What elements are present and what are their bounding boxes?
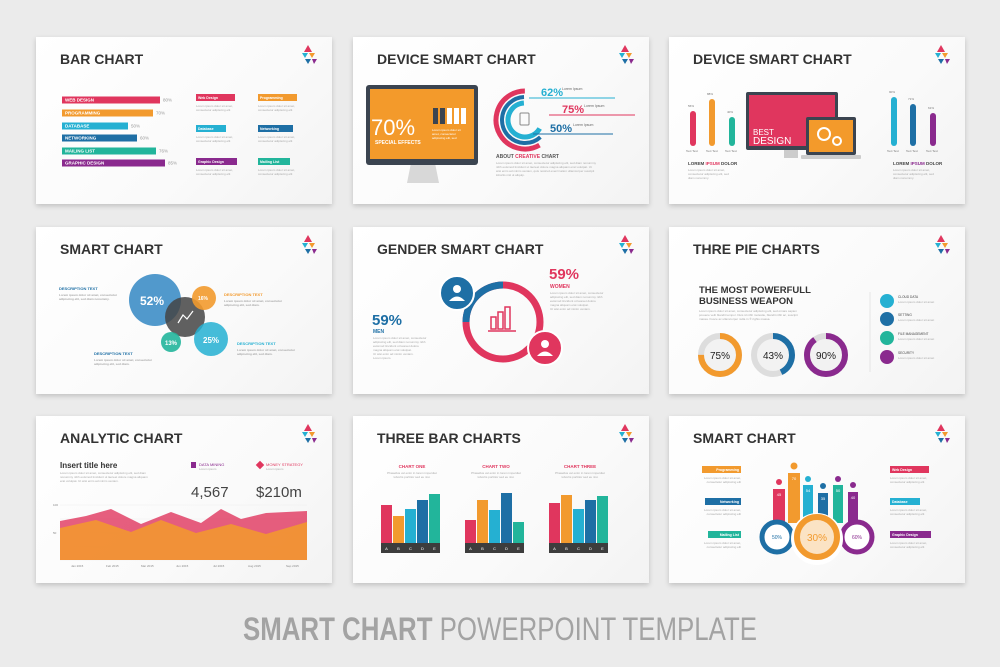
description labels: DESCRIPTION TEXT bbox=[237, 341, 276, 346]
title: DEVICE SMART CHART bbox=[693, 51, 852, 67]
left tubes: Text Text bbox=[725, 149, 737, 153]
chart one: Phasellus vel enim in lorem imperdiet bbox=[387, 471, 437, 475]
bars and circles: 45 bbox=[777, 492, 782, 497]
right tags: consectetur adipiscing elit bbox=[890, 512, 925, 516]
icon list: Lorem ipsum dolor sit amet bbox=[898, 318, 934, 322]
donuts: 43% bbox=[763, 351, 783, 362]
chart three: C bbox=[577, 546, 580, 551]
chart two: B bbox=[481, 546, 484, 551]
bars and circles: 35 bbox=[821, 496, 826, 501]
women stats bbox=[549, 266, 603, 311]
tags: Web Design bbox=[198, 96, 218, 100]
logo bbox=[302, 45, 317, 64]
logo bbox=[302, 424, 317, 443]
chart three: E bbox=[601, 546, 604, 551]
logo bbox=[619, 45, 634, 64]
text blocks: Lorem ipsum dolor sit amet, bbox=[688, 168, 725, 172]
description labels: Lorem ipsum dolor sit amet, consectetur bbox=[224, 299, 283, 303]
icon list bbox=[880, 294, 934, 364]
chart two bbox=[465, 464, 524, 553]
slide: gender smart chart bbox=[353, 227, 649, 394]
men stats: Ut wisi enim ad minim veniam. bbox=[373, 352, 414, 356]
title: GENDER SMART CHART bbox=[377, 241, 544, 257]
icon list: Lorem ipsum dolor sit amet bbox=[898, 356, 934, 360]
horizontal bars: 76% bbox=[159, 148, 168, 154]
slide: bar chart: Lorem ipsum dolor sit amet, bbox=[258, 168, 295, 172]
area chart: Jul 2015 bbox=[213, 564, 225, 568]
logo bbox=[619, 235, 634, 254]
footer title: SMART CHART POWERPOINT TEMPLATE bbox=[243, 611, 757, 647]
chart two: C bbox=[493, 546, 496, 551]
tags: Networking bbox=[260, 127, 279, 131]
stats: MONEY STRATEGY bbox=[266, 462, 303, 467]
icon list: Lorem ipsum dolor sit amet bbox=[898, 300, 934, 304]
description labels: adipiscing elit, sed diam. bbox=[237, 352, 273, 356]
intro text: nonummy nibh euismod tincidunt ut laoreet dolore magna aliquam bbox=[60, 475, 148, 479]
right tags bbox=[890, 466, 931, 549]
slide: smart chart infographic bbox=[669, 416, 965, 583]
slide: bar chart: consectetur adipiscing elit bbox=[258, 172, 293, 176]
women stats: adipiscing elit, sed diam nonummy nibh bbox=[550, 295, 603, 299]
left tubes: Text Text bbox=[706, 149, 718, 153]
description labels: Lorem ipsum dolor sit amet, consectetur bbox=[237, 348, 296, 352]
intro text: erat volutpat. Ut wisi enim ad minim veniam. bbox=[60, 479, 119, 483]
horizontal bars bbox=[62, 96, 177, 166]
slide: bar chart: Lorem ipsum dolor sit amet, bbox=[196, 135, 233, 139]
bars and circles: 40 bbox=[851, 495, 856, 500]
tags: Mailing List bbox=[260, 160, 280, 164]
chart three: Phasellus vel enim in lorem imperdiet bbox=[555, 471, 605, 475]
description labels: DESCRIPTION TEXT bbox=[59, 286, 98, 291]
left tags: Programming bbox=[716, 468, 739, 472]
chart three: B bbox=[565, 546, 568, 551]
text blocks bbox=[688, 161, 943, 180]
women stats: Lorem ipsum dolor sit amet, consectetur bbox=[550, 291, 603, 295]
monitor and laptop bbox=[746, 92, 861, 159]
right tags: Lorem ipsum dolor sit amet, bbox=[890, 508, 927, 512]
donuts: 90% bbox=[816, 351, 836, 362]
headline: BUSINESS WEAPON bbox=[699, 296, 793, 307]
horizontal bars: DATABASE bbox=[65, 124, 89, 128]
chart two: lobortis porttitor sed eu nisi. bbox=[478, 475, 515, 479]
bubbles: 52% bbox=[140, 294, 164, 308]
men stats bbox=[372, 312, 426, 360]
chart two: A bbox=[469, 546, 472, 551]
horizontal bars: MAILING LIST bbox=[65, 148, 95, 154]
logo bbox=[935, 45, 950, 64]
title: ANALYTIC CHART bbox=[60, 430, 183, 446]
about text: ABOUT CREATIVE CHART bbox=[496, 154, 559, 160]
stats: 4,567 bbox=[191, 484, 229, 501]
right tags: consectetur adipiscing elit bbox=[890, 545, 925, 549]
slide: device smart chart 1: Lorem Ipsum bbox=[562, 87, 583, 91]
description labels bbox=[59, 286, 296, 366]
chart three bbox=[549, 464, 608, 553]
slide: bar chart: Lorem ipsum dolor sit amet, bbox=[196, 168, 233, 172]
women stats: WOMEN bbox=[550, 284, 570, 290]
slide: device smart chart 1: Lorem Ipsum bbox=[573, 123, 594, 127]
chart one: B bbox=[397, 546, 400, 551]
right tubes: 61% bbox=[928, 106, 934, 110]
monitor and laptop: BEST bbox=[753, 128, 774, 137]
monitor: SPECIAL EFFECTS bbox=[375, 140, 421, 146]
left tags: Mailing List bbox=[720, 533, 740, 537]
left tubes: 56% bbox=[688, 104, 694, 108]
logo bbox=[302, 235, 317, 254]
slide: bar chart: consectetur adipiscing elit bbox=[258, 139, 293, 143]
bars and circles bbox=[762, 462, 872, 565]
left tags bbox=[702, 466, 741, 549]
bubbles: 16% bbox=[198, 296, 209, 302]
area chart: Sep 2015 bbox=[286, 564, 299, 568]
men stats: Lorem ipsum. bbox=[373, 356, 391, 360]
chart one: D bbox=[421, 546, 424, 551]
icon list: CLOUD DATA bbox=[898, 295, 919, 299]
intro text: Lorem ipsum dolor sit amet, consectetur adipiscing elit, sed diam bbox=[60, 471, 147, 475]
horizontal bars: WEB DESIGN bbox=[65, 98, 94, 102]
left tubes bbox=[686, 92, 737, 153]
slide: device smart chart 1: 75% bbox=[562, 104, 584, 116]
title: DEVICE SMART CHART bbox=[377, 51, 536, 67]
right tags: Lorem ipsum dolor sit amet, bbox=[890, 541, 927, 545]
bubbles bbox=[129, 274, 228, 356]
monitor: amet, consectetur bbox=[432, 132, 456, 136]
right tags: Lorem ipsum dolor sit amet, bbox=[890, 476, 927, 480]
stats: Lorem ipsum bbox=[266, 467, 284, 471]
title: SMART CHART bbox=[693, 430, 796, 446]
men stats: euismod tincidunt ut laoreet dolore bbox=[373, 344, 419, 348]
title: THRE PIE CHARTS bbox=[693, 241, 820, 257]
left tags: Lorem ipsum dolor sit amet, bbox=[704, 508, 741, 512]
headline bbox=[699, 285, 811, 321]
horizontal bars: GRAPHIC DESIGN bbox=[65, 160, 104, 166]
area chart: Jun 2015 bbox=[176, 564, 189, 568]
men stats: MEN bbox=[373, 329, 384, 335]
left tags: consectetur adipiscing elit bbox=[707, 480, 741, 484]
area chart: 50 bbox=[53, 531, 57, 535]
headline: THE MOST POWERFULL bbox=[699, 285, 811, 296]
horizontal bars: 85% bbox=[168, 160, 177, 166]
monitor and laptop: DESIGN bbox=[753, 136, 791, 147]
horizontal bars: NETWORKING bbox=[65, 136, 97, 140]
chart one: E bbox=[433, 546, 436, 551]
right tags: Web Design bbox=[892, 468, 912, 472]
right tubes: 71% bbox=[908, 97, 914, 101]
slide: device smart chart 1: wisi enim ad minim veniam, quis nostrud exerci tation ullamcorper suscipit bbox=[496, 169, 594, 173]
chart three: CHART THREE bbox=[564, 464, 596, 469]
stats: DATA MINING bbox=[199, 462, 224, 467]
men stats: magna aliquam erat volutpat. bbox=[373, 348, 412, 352]
chart two: Phasellus vel enim in lorem imperdiet bbox=[471, 471, 521, 475]
stats: $210m bbox=[256, 484, 302, 501]
left tags: Lorem ipsum dolor sit amet, bbox=[704, 541, 741, 545]
headline: Lorem ipsum dolor sit amet, consectetur adipiscing elit, sed ornare sapien bbox=[699, 309, 797, 313]
bars and circles: 50 bbox=[836, 488, 841, 493]
area chart bbox=[53, 503, 307, 568]
right tags: Graphic Design bbox=[892, 533, 918, 537]
logo bbox=[935, 235, 950, 254]
chart one: A bbox=[385, 546, 388, 551]
area chart: 100 bbox=[53, 503, 58, 507]
women stats: magna aliquam erat volutpat. bbox=[550, 303, 589, 307]
stats: Lorem ipsum bbox=[199, 467, 217, 471]
tags: Graphic Design bbox=[198, 160, 224, 164]
chart three: D bbox=[589, 546, 592, 551]
chart one: CHART ONE bbox=[399, 464, 425, 469]
text blocks: diam nonummy. bbox=[688, 176, 709, 180]
chart two: CHART TWO bbox=[482, 464, 510, 469]
monitor: adipiscing elit, sed bbox=[432, 136, 457, 140]
chart two: D bbox=[505, 546, 508, 551]
logo bbox=[935, 424, 950, 443]
slide: device smart chart 1 bbox=[353, 37, 649, 204]
women stats: Ut wisi enim ad minim veniam. bbox=[550, 307, 591, 311]
area chart: Feb 2015 bbox=[106, 564, 119, 568]
title: BAR CHART bbox=[60, 51, 144, 67]
tags: Database bbox=[198, 127, 214, 131]
chart one: lobortis porttitor sed eu nisi. bbox=[394, 475, 431, 479]
left tags: consectetur adipiscing elit bbox=[707, 545, 741, 549]
bubbles: 13% bbox=[165, 341, 178, 347]
text blocks: consectetur adipiscing elit, sed bbox=[688, 172, 729, 176]
chart one bbox=[381, 464, 440, 553]
area chart: Mar 2015 bbox=[141, 564, 154, 568]
women stats: euismod tincidunt ut laoreet dolore bbox=[550, 299, 596, 303]
horizontal bars: 60% bbox=[140, 136, 149, 140]
right tubes: Text Text bbox=[887, 149, 899, 153]
left tags: Lorem ipsum dolor sit amet, bbox=[704, 476, 741, 480]
slide: device smart chart 1: Lorem Ipsum bbox=[584, 104, 605, 108]
tags: Programming bbox=[260, 96, 283, 100]
monitor bbox=[366, 85, 478, 183]
ring chart bbox=[440, 276, 562, 365]
description labels: Lorem ipsum dolor sit amet, consectetur bbox=[59, 293, 118, 297]
title: SMART CHART bbox=[60, 241, 163, 257]
icon list: Lorem ipsum dolor sit amet bbox=[898, 337, 934, 341]
bars and circles: 30% bbox=[807, 533, 827, 544]
left tags: consectetur adipiscing elit bbox=[707, 512, 741, 516]
slide: device smart chart 1: Lorem ipsum dolor sit amet, consectetur adipiscing elit, sed diam nonummy bbox=[496, 161, 597, 165]
men stats: adipiscing elit, sed diam nonummy nibh bbox=[373, 340, 426, 344]
horizontal bars: PROGRAMMING bbox=[65, 110, 101, 116]
stats bbox=[191, 461, 303, 501]
donuts bbox=[701, 336, 845, 374]
left tags: Networking bbox=[720, 500, 739, 504]
icon list: SECURITY bbox=[898, 351, 915, 355]
description labels: adipiscing elit, sed diam. bbox=[224, 303, 260, 307]
horizontal bars: 70% bbox=[156, 110, 165, 116]
slide: smart chart bubbles bbox=[36, 227, 332, 394]
slide: bar chart: consectetur adipiscing elit bbox=[196, 108, 231, 112]
bars and circles: 70 bbox=[792, 476, 797, 481]
slide: bar chart bbox=[36, 37, 332, 204]
title: THREE BAR CHARTS bbox=[377, 430, 521, 446]
slide: three bar charts bbox=[353, 416, 649, 583]
intro text bbox=[60, 461, 148, 483]
right tubes: Text Text bbox=[906, 149, 918, 153]
left tubes: 40% bbox=[727, 110, 733, 114]
bars and circles: 60% bbox=[852, 535, 863, 541]
right tubes: 90% bbox=[889, 90, 895, 94]
right tubes: Text Text bbox=[926, 149, 938, 153]
slide: device smart chart 1: 50% bbox=[550, 123, 572, 135]
donuts: 75% bbox=[710, 351, 730, 362]
slide: bar chart: Lorem ipsum dolor sit amet, bbox=[258, 135, 295, 139]
right tubes bbox=[887, 90, 938, 153]
icon list: FILE MANAGEMENT bbox=[898, 332, 929, 336]
description labels: adipiscing elit, sed diam nonummy. bbox=[59, 297, 110, 301]
text blocks: diam nonummy. bbox=[893, 176, 914, 180]
slide: bar chart: Lorem ipsum dolor sit amet, bbox=[258, 104, 295, 108]
area chart: Aug 2015 bbox=[248, 564, 261, 568]
arc chart bbox=[485, 80, 635, 160]
slide: bar chart: Lorem ipsum dolor sit amet, bbox=[196, 104, 233, 108]
logo bbox=[619, 424, 634, 443]
intro text: Insert title here bbox=[60, 461, 118, 470]
icon list: SETTING bbox=[898, 313, 912, 317]
right tags: Database bbox=[892, 500, 908, 504]
slide: bar chart: consectetur adipiscing elit bbox=[196, 139, 231, 143]
slide: device smart chart 2 bbox=[669, 37, 965, 204]
description labels: DESCRIPTION TEXT bbox=[94, 351, 133, 356]
headline: massa. Fusce ac ullamcorper nulla in ® rights massa. bbox=[699, 317, 770, 321]
slide: device smart chart 1: 62% bbox=[541, 87, 563, 99]
description labels: adipiscing elit, sed diam. bbox=[94, 362, 130, 366]
chart two: E bbox=[517, 546, 520, 551]
bubbles: 25% bbox=[203, 336, 219, 345]
bars and circles: 54 bbox=[806, 488, 811, 493]
slide: device smart chart 1: lobortis nisl ut aliquip. bbox=[496, 173, 525, 177]
area chart: Jan 2015 bbox=[71, 564, 84, 568]
text blocks: consectetur adipiscing elit, sed bbox=[893, 172, 934, 176]
left tubes: Text Text bbox=[686, 149, 698, 153]
slide: bar chart: consectetur adipiscing elit bbox=[196, 172, 231, 176]
horizontal bars: 50% bbox=[131, 124, 140, 128]
left tubes: 88% bbox=[707, 92, 713, 96]
men stats: 59% bbox=[372, 312, 402, 329]
chart three: A bbox=[553, 546, 556, 551]
bars and circles: 50% bbox=[772, 535, 783, 541]
men stats: Lorem ipsum dolor sit amet, consectetur bbox=[373, 336, 426, 340]
text blocks: LOREM IPSUM DOLOR bbox=[893, 161, 943, 166]
slide: bar chart: consectetur adipiscing elit bbox=[258, 108, 293, 112]
slide: device smart chart 1: nibh euismod tincidunt ut laoreet dolore magna aliquam erat volutpat. Ut bbox=[496, 165, 592, 169]
description labels: Lorem ipsum dolor sit amet, consectetur bbox=[94, 358, 153, 362]
tags bbox=[196, 94, 297, 165]
text blocks: Lorem ipsum dolor sit amet, bbox=[893, 168, 930, 172]
monitor: 70% bbox=[371, 115, 415, 140]
text blocks: LOREM IPSUM DOLOR bbox=[688, 161, 738, 166]
headline: posuere velit blandit tempor. Duis id nibh molestie, blandit nibh ac, suscipit bbox=[699, 313, 798, 317]
chart one: C bbox=[409, 546, 412, 551]
right tags: consectetur adipiscing elit bbox=[890, 480, 925, 484]
women stats: 59% bbox=[549, 266, 579, 283]
description labels: DESCRIPTION TEXT bbox=[224, 292, 263, 297]
slide: three pie charts bbox=[669, 227, 965, 394]
monitor: Lorem ipsum dolor sit bbox=[432, 128, 461, 132]
chart three: lobortis porttitor sed eu nisi. bbox=[562, 475, 599, 479]
slide: analytic chart bbox=[36, 416, 332, 583]
horizontal bars: 80% bbox=[163, 98, 172, 102]
